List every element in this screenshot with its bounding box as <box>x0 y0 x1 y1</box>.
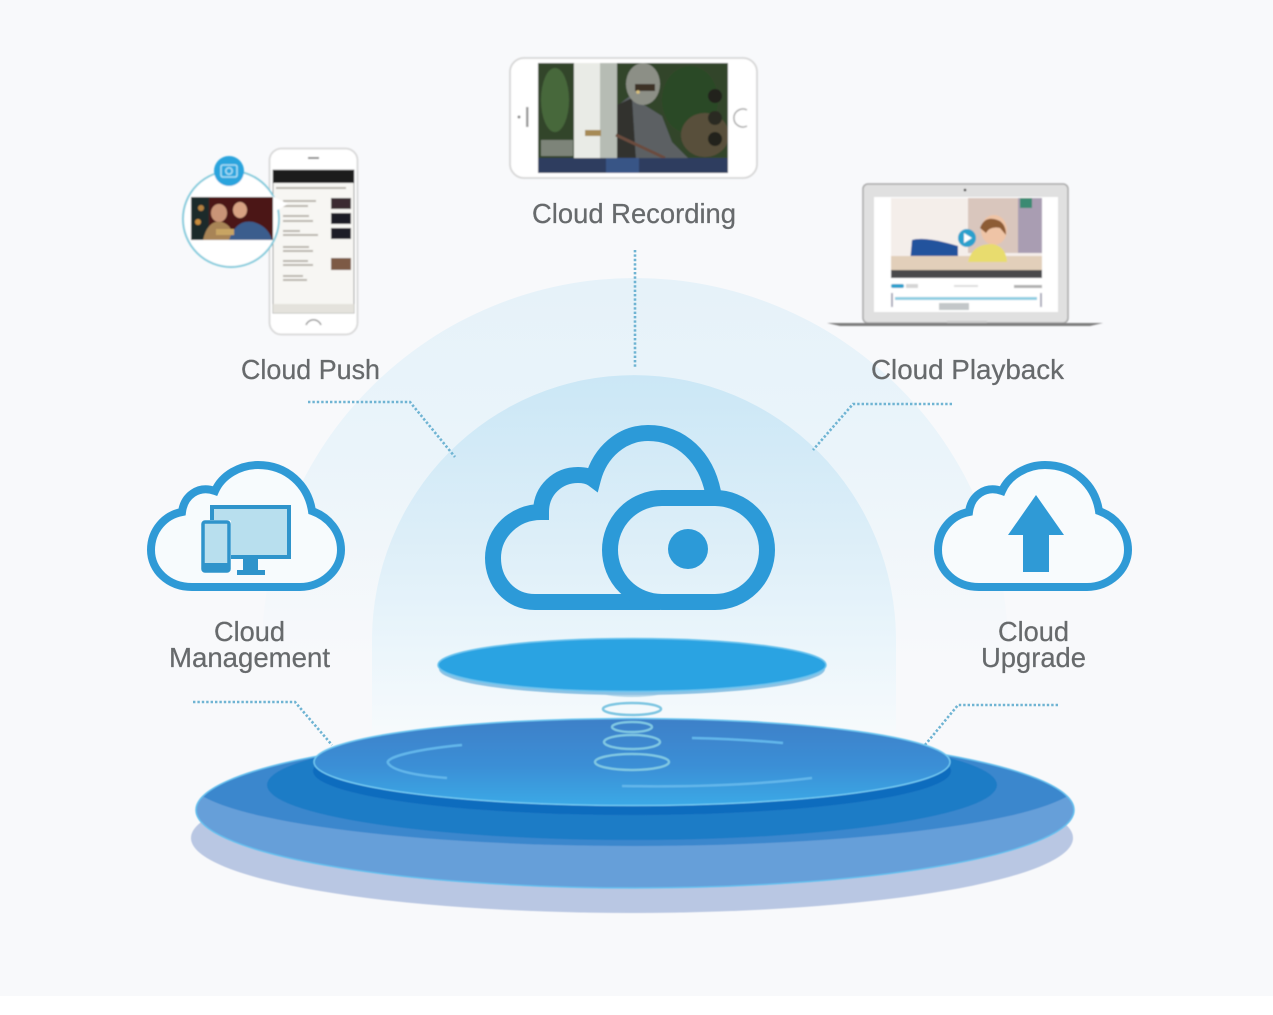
icon: play button <box>958 229 976 247</box>
panel: cloud push phone illustration <box>183 148 358 334</box>
connector: cloud management <box>193 702 332 745</box>
platform lower disc <box>196 732 1074 888</box>
label: Cloud Management: Cloud <box>214 616 285 647</box>
label: Cloud Management <box>169 616 330 673</box>
label: Cloud Recording: Cloud Recording <box>532 198 736 229</box>
label: Cloud Push: Cloud Push <box>241 354 380 385</box>
panel: cloud playback laptop illustration <box>827 184 1103 326</box>
connector: cloud playback <box>813 404 952 450</box>
callout bubble <box>183 171 279 267</box>
platform shadow rim <box>313 727 951 815</box>
video frame <box>538 63 729 173</box>
notification list <box>276 187 346 281</box>
icon: cloud with camera <box>493 433 767 602</box>
label: Cloud Upgrade: Cloud <box>998 616 1069 647</box>
platform top disc <box>314 718 950 806</box>
signal rings <box>595 703 669 770</box>
phone body <box>510 58 757 178</box>
connector: cloud upgrade <box>925 705 1058 745</box>
laptop lid <box>863 184 1068 323</box>
label: Cloud Upgrade <box>981 616 1086 673</box>
platform shadow <box>191 763 1073 913</box>
laptop base <box>827 323 1103 326</box>
icon: cloud with upload arrow <box>938 465 1128 587</box>
panel: cloud recording phone illustration <box>510 58 757 178</box>
label: Cloud Management: Management <box>169 642 330 673</box>
phone body <box>270 148 358 334</box>
callout photo <box>191 197 273 240</box>
player controls <box>891 270 1042 278</box>
inner dome <box>372 375 896 730</box>
label: Cloud Playback: Cloud Playback <box>871 354 1064 385</box>
outer dome <box>262 278 1008 660</box>
label: Cloud Upgrade: Upgrade <box>981 642 1086 673</box>
video frame <box>891 198 1042 270</box>
disc arcs <box>388 738 812 786</box>
connector: cloud push <box>308 402 455 457</box>
icon: camera badge <box>214 156 244 186</box>
platform upper band <box>204 756 1066 846</box>
floating disc <box>438 638 826 697</box>
platform inner shade <box>267 730 997 840</box>
base platform <box>189 714 1081 913</box>
icon: cloud with devices <box>151 465 341 587</box>
connector: cloud recording <box>634 250 636 368</box>
burglar figure <box>621 96 688 159</box>
